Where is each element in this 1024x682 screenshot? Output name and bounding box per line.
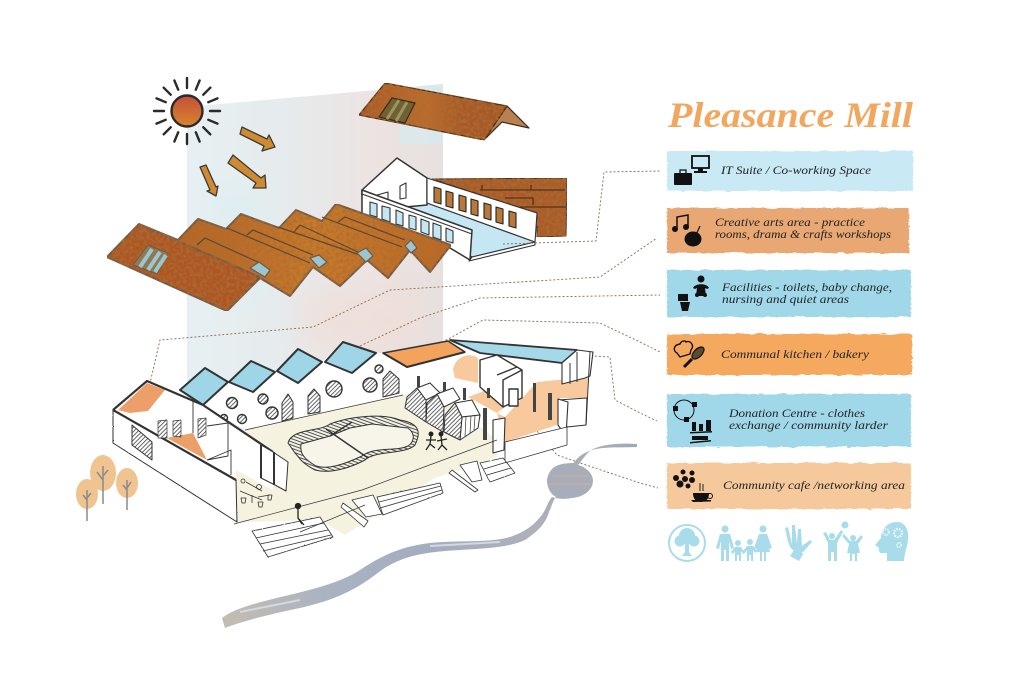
right steps	[480, 458, 515, 482]
blue floor	[407, 203, 535, 257]
textured background panel	[187, 84, 452, 432]
icon: children and ball	[823, 522, 863, 561]
leader lines	[147, 171, 660, 488]
dark columns	[417, 376, 552, 440]
panel: creative arts: rooms, drama & crafts workshops	[715, 227, 891, 241]
icon: hands	[785, 525, 812, 561]
panel: community cafe	[667, 463, 911, 509]
left wing	[113, 381, 288, 522]
panel: facilities: nursing and quiet areas	[722, 292, 849, 306]
icon: computer and briefcase	[674, 156, 709, 185]
icon row: values	[669, 522, 908, 561]
internal cube room	[480, 355, 522, 407]
icon: family	[716, 526, 772, 561]
panel: creative arts: Creative arts area - practice	[715, 215, 866, 229]
icon: sun	[154, 78, 220, 144]
right end walls	[493, 350, 593, 463]
main rusted sawtooth roof	[107, 204, 451, 311]
bottom steps left	[252, 517, 333, 557]
panel: communal kitchen	[667, 334, 912, 375]
back roof	[432, 178, 567, 237]
middle steps	[377, 483, 443, 515]
skylight on first roof	[133, 245, 168, 274]
panel: creative arts	[667, 208, 909, 253]
peach floors	[453, 355, 588, 442]
sawtooth wall	[180, 341, 480, 430]
panel: donation centre: Donation Centre - clothes	[728, 406, 865, 420]
icon: music and palette	[672, 215, 702, 246]
back wall with windows	[427, 178, 537, 242]
panel: IT suite: IT Suite / Co-working Space	[720, 163, 872, 177]
panel: donation centre: exchange / community larder	[729, 418, 888, 432]
arrows: sunlight	[200, 127, 275, 196]
panel: facilities	[667, 270, 911, 317]
arched doors	[282, 371, 399, 421]
icon: tree in circle	[669, 525, 705, 561]
courtyard	[233, 395, 497, 535]
central raised planter	[288, 416, 418, 471]
ridge slots	[197, 217, 405, 263]
panel: communal kitchen: Communal kitchen / bakery	[721, 347, 870, 361]
gable wall	[362, 158, 427, 207]
huts	[405, 383, 480, 440]
small skylight notches	[250, 240, 417, 277]
top gable roof	[359, 83, 529, 140]
exploded middle building	[362, 158, 567, 261]
ramp patches	[341, 461, 482, 527]
panel: donation centre	[667, 394, 911, 447]
panel: community cafe: Community cafe /networking area	[723, 478, 905, 492]
cafe tables	[240, 479, 272, 507]
icon: head with gears	[875, 522, 908, 561]
panel: facilities: Facilities - toilets, baby change,	[721, 280, 892, 294]
trees	[76, 455, 138, 521]
icon: recycling clothes and shelf	[673, 400, 712, 444]
icon: network and coffee cup	[673, 470, 712, 502]
river	[222, 444, 637, 628]
title: Pleasance Mill	[667, 95, 913, 135]
icon: baby and toilet	[678, 276, 709, 311]
blue skylights	[180, 342, 376, 405]
figures	[296, 432, 447, 525]
front wall with windows	[362, 190, 535, 261]
round windows	[220, 365, 383, 424]
lower building axonometric	[113, 340, 593, 557]
panel: IT suite	[667, 151, 913, 191]
icon: chef hat and whisk	[674, 341, 706, 367]
skylight	[379, 98, 415, 123]
orange and blue roofs right	[383, 340, 577, 367]
